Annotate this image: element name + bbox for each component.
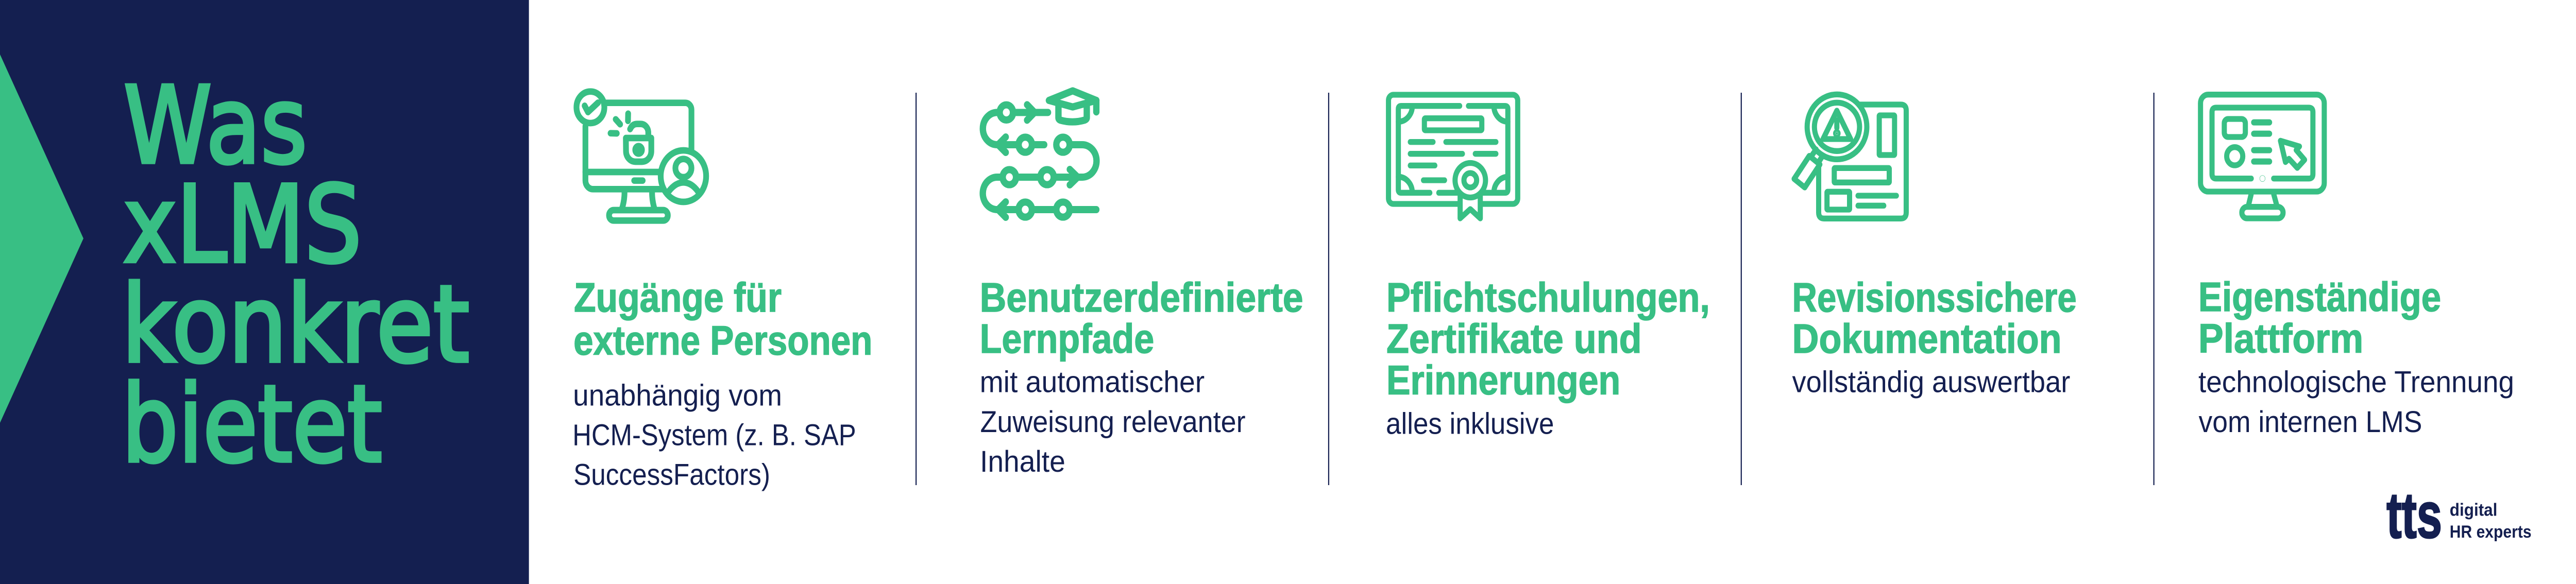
heading: Benutzerdefinierte [980,274,1303,320]
heading: Eigenständige [2198,274,2441,320]
panel: Benutzerdefinierte Lernpfade [980,91,1303,478]
title: xLMS [123,163,362,286]
body text [980,365,1246,478]
heading: Lernpfade [980,316,1154,362]
icon: learning path with graduation cap [983,91,1096,217]
panel: Eigenständige Plattform [2198,95,2514,439]
body text: alles inklusive [1386,407,1554,440]
panel: Pflichtschulungen, Zertifikate und Erinnerungen [1386,95,1710,440]
panel: Revisionssichere Dokumentation [1792,94,2077,399]
title: konkret [122,263,469,386]
body text: SuccessFactors) [573,458,770,491]
icon: monitor with interface and cursor [2200,95,2324,218]
panel: Zugänge für externe Personen [572,92,872,491]
body text: HCM-System (z. B. SAP [572,418,856,452]
heading: Pflichtschulungen, [1386,274,1710,320]
heading [980,274,1303,362]
heading [1792,274,2077,362]
logo: tts digital HR experts [2386,479,2532,551]
heading [1386,274,1710,403]
logo: tts digital HR experts: tts [2386,479,2442,551]
logo: tts digital HR experts: digital [2450,500,2497,520]
logo: tts digital HR experts: HR experts [2450,522,2532,541]
title [122,64,469,486]
heading: Dokumentation [1792,316,2062,362]
body text: vom internen LMS [2199,405,2422,439]
heading: externe Personen [573,317,872,363]
title: Was [124,64,307,187]
body text: technologische Trennung [2198,365,2514,399]
heading: Erinnerungen [1386,357,1620,403]
heading: Zugänge für [574,274,782,320]
heading: Plattform [2198,315,2363,361]
body text: Zuweisung relevanter [980,405,1246,439]
body text: vollständig auswertbar [1792,365,2070,399]
body text [2198,365,2514,439]
heading [573,274,872,363]
body text [572,379,856,491]
icon: monitor with lock and user [577,92,706,220]
body text: mit automatischer [980,365,1205,399]
heading: Zertifikate und [1386,316,1642,362]
arrow: green triangle [0,55,83,423]
body text: Inhalte [980,444,1065,478]
icon: certificate with seal [1388,95,1518,218]
title: bietet [122,363,382,486]
heading [2198,274,2441,361]
panel: navy title panel [0,0,529,584]
icon: document with magnifier and warning [1794,94,1906,218]
heading: Revisionssichere [1792,274,2077,320]
body text: unabhängig vom [573,379,782,412]
